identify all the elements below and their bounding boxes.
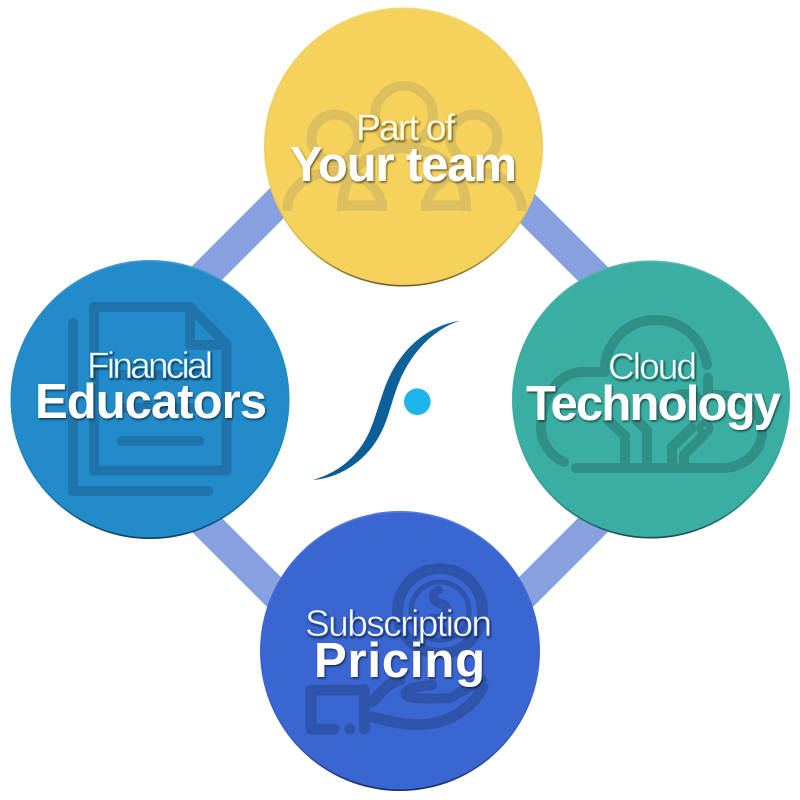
yellow circle bbox=[264, 8, 543, 286]
logo dot bbox=[404, 388, 431, 415]
circle rim bbox=[513, 261, 789, 538]
connector: bottom left bbox=[81, 399, 400, 718]
logo swoosh bbox=[313, 321, 460, 480]
royal blue circle bbox=[260, 511, 540, 791]
icon: stacked documents bbox=[73, 307, 226, 491]
label: educators: Educators bbox=[35, 375, 267, 429]
logo bbox=[313, 321, 460, 480]
teal circle bbox=[512, 260, 790, 538]
icon: coin in open hand bbox=[311, 568, 483, 732]
connector diamond bbox=[81, 80, 718, 718]
label: your team: Your team bbox=[290, 138, 517, 192]
blue circle bbox=[10, 260, 290, 539]
connector: top right bbox=[400, 80, 718, 400]
label: part of: Part of bbox=[356, 107, 456, 148]
icon: team of three people bbox=[287, 86, 522, 211]
label: technology: Technology bbox=[526, 377, 781, 431]
label: financial: Financial bbox=[87, 345, 213, 386]
label: subscription: Subscription bbox=[305, 603, 492, 644]
circle rim bbox=[11, 261, 289, 538]
icon: circuit cloud bbox=[541, 320, 762, 468]
circle rim bbox=[265, 8, 542, 286]
circle rim bbox=[261, 512, 539, 790]
panel: financial educators bbox=[10, 260, 290, 539]
label: pricing: Pricing bbox=[314, 634, 485, 688]
panel: part of your team bbox=[264, 8, 543, 286]
connector: top left bbox=[81, 80, 400, 399]
panel: subscription pricing bbox=[260, 511, 540, 791]
connector: bottom right bbox=[400, 400, 718, 718]
panel: cloud technology bbox=[512, 260, 790, 538]
label: cloud: Cloud bbox=[608, 346, 697, 387]
